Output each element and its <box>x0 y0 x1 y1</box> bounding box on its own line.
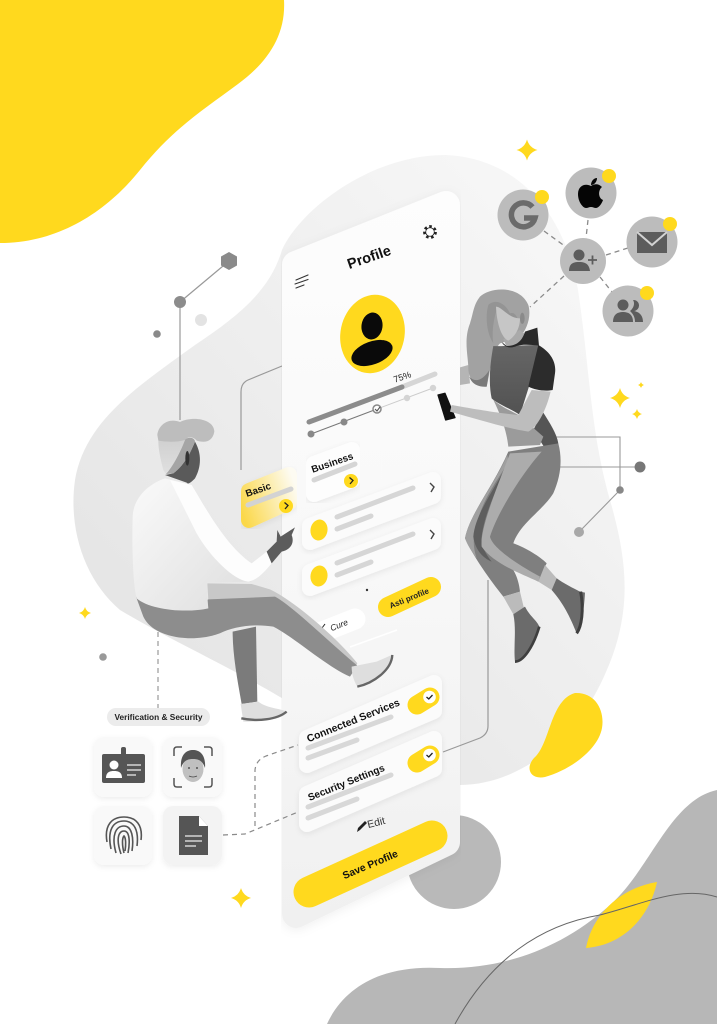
hair <box>157 419 214 442</box>
background blob: light gray <box>73 155 625 785</box>
background blob: yellow top left <box>0 0 284 243</box>
phone panel <box>296 205 446 914</box>
dashed connector: man to verification <box>157 632 159 708</box>
sleeve <box>528 345 555 391</box>
thin curve <box>455 893 717 1024</box>
face <box>158 440 185 474</box>
broad light stripe <box>482 452 542 582</box>
tile: document <box>163 806 222 865</box>
tile: ID card <box>94 737 152 797</box>
small dot <box>366 589 368 591</box>
ear <box>520 313 525 324</box>
yellow accent <box>586 882 657 948</box>
bottom right wave shapes <box>327 790 717 1024</box>
connector: basic card to phone <box>241 366 282 470</box>
beard and collar <box>165 442 200 483</box>
man head <box>157 419 214 483</box>
card: Connected Services <box>305 683 436 765</box>
outer light stripe <box>465 455 508 558</box>
hair back <box>467 289 529 387</box>
edit action: Edit <box>366 815 387 831</box>
hair inner strand <box>487 302 518 343</box>
card: Basic: Basic <box>244 481 273 500</box>
face <box>496 307 520 341</box>
leg silhouette <box>465 443 561 597</box>
card: Business: Business <box>310 451 355 476</box>
card: Business <box>310 450 358 494</box>
button: Asti profile: Asti profile <box>388 586 431 610</box>
left ankle band <box>503 592 524 614</box>
gray wave <box>327 790 717 1024</box>
back lower leg <box>233 627 257 704</box>
right sole <box>577 592 582 633</box>
icon: Apple <box>566 168 616 218</box>
dashed connectors: verification to cards <box>223 745 298 835</box>
front shoe <box>352 655 392 687</box>
dark side panel <box>533 412 558 448</box>
progress: 75% <box>308 369 436 438</box>
figure: woman upper body <box>450 289 555 447</box>
dashed links <box>530 220 628 307</box>
social network cluster <box>498 168 678 336</box>
thigh highlight <box>207 583 357 668</box>
verification and security pill <box>107 708 210 726</box>
torso <box>132 478 252 611</box>
phone in hand <box>438 393 455 420</box>
gray circle behind phone <box>407 815 501 909</box>
button: Save Profile <box>309 836 432 892</box>
shirt <box>490 345 540 415</box>
progress: 75%: 75% <box>392 369 412 385</box>
phone header <box>295 226 436 288</box>
decorative dots left <box>99 314 207 661</box>
card: Basic <box>244 475 293 520</box>
figure: seated man <box>132 478 392 722</box>
back sole <box>241 712 287 720</box>
button: Cure: Cure <box>329 617 350 633</box>
title: Profile <box>345 243 393 273</box>
collar <box>502 328 539 347</box>
hair lower shade <box>469 370 489 387</box>
card: Connected Services: Connected Services <box>305 698 402 745</box>
button: Save Profile: Save Profile <box>341 849 400 882</box>
figure: woman legs <box>438 393 585 662</box>
front sole <box>357 655 392 687</box>
connector: hexagon node top left <box>174 252 237 420</box>
dark stripe <box>473 462 508 562</box>
verification and security pill: Verification & Security <box>114 712 203 722</box>
hand <box>267 527 295 563</box>
card: Security Settings <box>307 739 436 824</box>
connector: right nodes <box>555 437 646 537</box>
left sole <box>515 627 539 662</box>
edit action <box>357 815 387 832</box>
list row 2 <box>309 526 434 588</box>
icon: Group <box>602 286 654 336</box>
icon: add user hub <box>560 238 606 284</box>
right foot <box>552 578 585 633</box>
back shoe <box>241 702 287 722</box>
rear arm <box>460 365 470 385</box>
arm <box>170 480 272 582</box>
right ankle band <box>538 565 557 590</box>
left foot <box>513 607 539 662</box>
sparkles <box>79 140 644 908</box>
arm <box>450 390 551 432</box>
waist <box>493 400 543 447</box>
neck shade <box>166 438 195 474</box>
tile: face scan <box>163 737 222 797</box>
card: Security Settings: Security Settings <box>307 763 387 804</box>
avatar <box>333 289 412 379</box>
neck <box>503 330 526 347</box>
tile: fingerprint <box>94 806 152 865</box>
icon: settings gear <box>424 226 436 238</box>
yellow blob lower right <box>530 693 603 777</box>
pants <box>136 597 357 677</box>
connector: security card to blob <box>443 580 488 752</box>
list row 1 <box>309 480 434 542</box>
button: Cure <box>322 617 397 647</box>
icon: Mail <box>626 216 678 268</box>
icon: hamburger menu <box>295 275 308 288</box>
ear <box>185 451 189 466</box>
icon: Google <box>498 190 549 240</box>
